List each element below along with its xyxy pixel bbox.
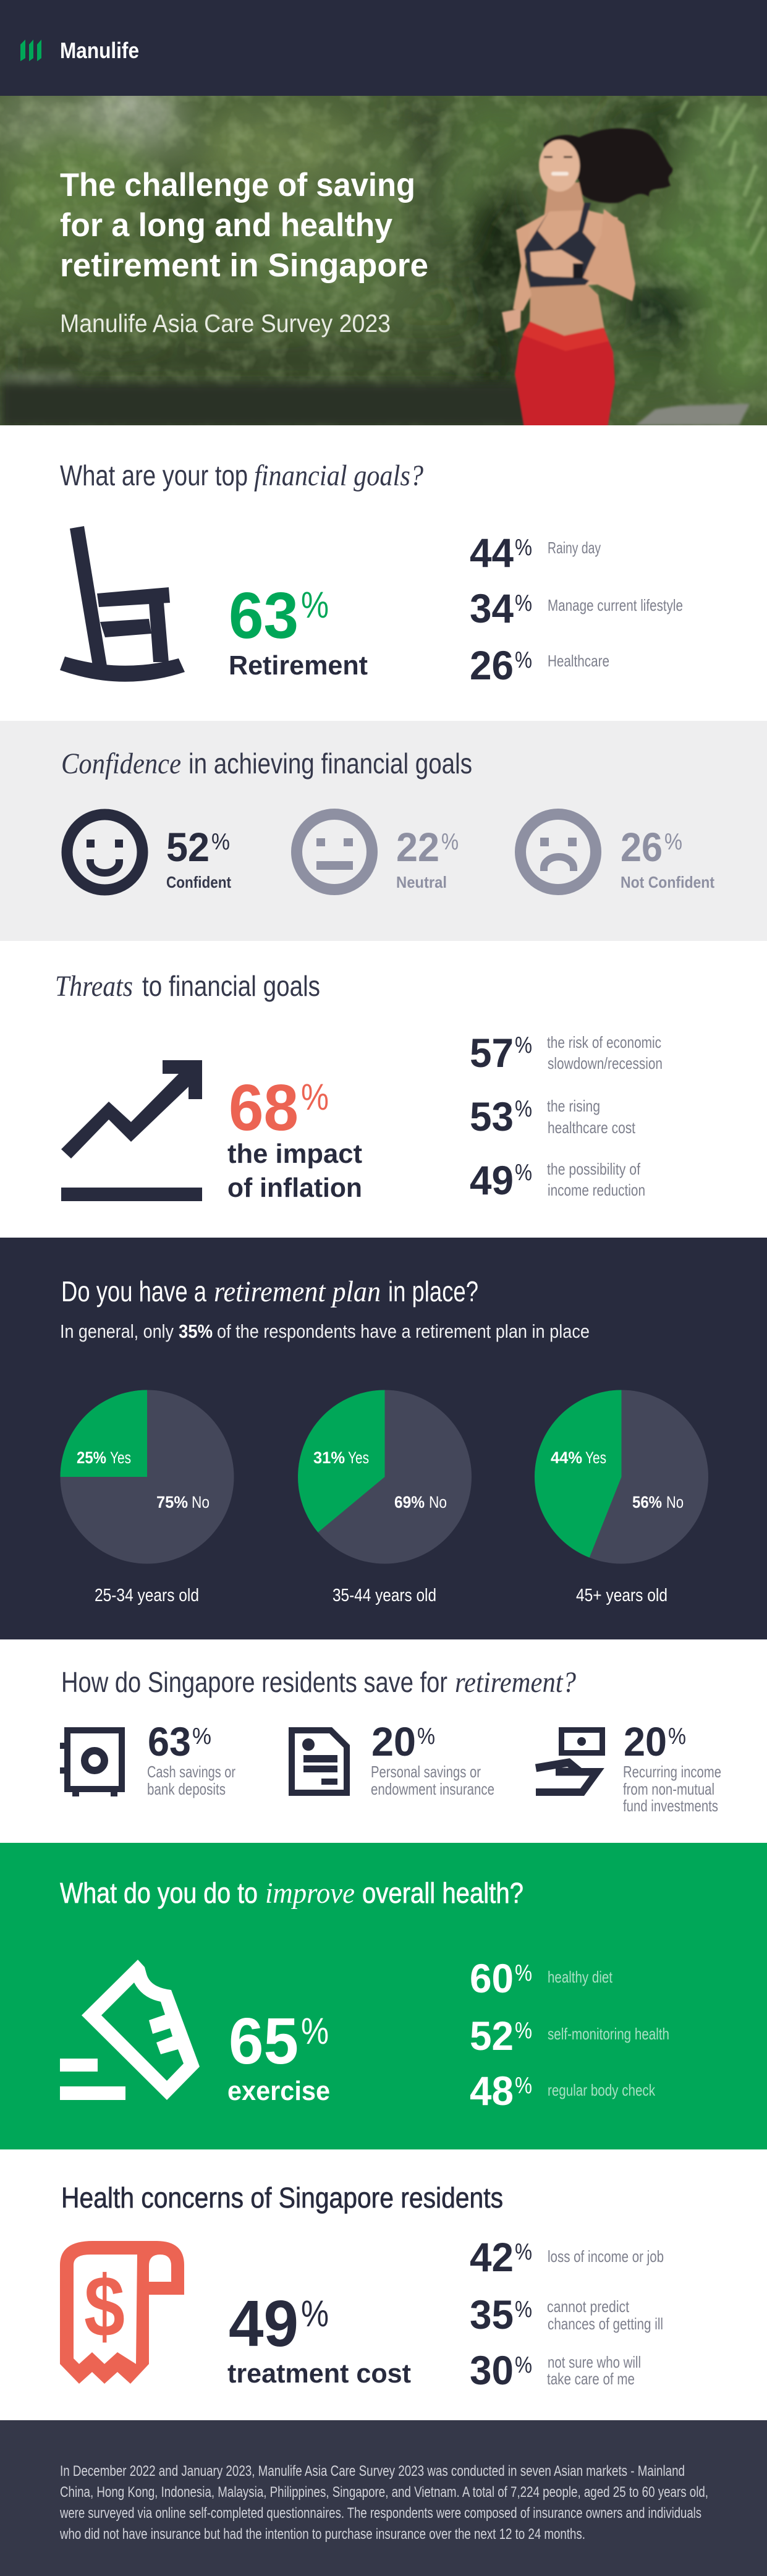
- stat: 65% exercise: exercise: [227, 2076, 330, 2106]
- stat: 60% healthy diet: %: [515, 1960, 532, 1986]
- stat: 30% who will take care: [470, 2347, 641, 2393]
- heading: retirement?: [455, 1666, 576, 1699]
- stat: 44% rainy day: %: [515, 535, 532, 561]
- stat: 30% who will take care: take care of me: [547, 2370, 635, 2388]
- stat: 52% self-monitoring health: %: [515, 2018, 532, 2044]
- stat: 49% income reduction: %: [515, 1160, 532, 1186]
- photo: forest background: [0, 87, 767, 428]
- pie chart: 25-34 years old: No: [192, 1493, 210, 1511]
- stat: 53% healthcare cost: %: [515, 1096, 532, 1122]
- title: [60, 167, 428, 284]
- stat: 44% rainy day: Rainy day: [548, 538, 601, 557]
- icon: rocking chair: [60, 526, 185, 682]
- subheading: In general, only: [60, 1320, 174, 1342]
- pie chart: 35-44 years old: 35-44 years old: [333, 1586, 436, 1605]
- icon: Manulife logo mark: [20, 40, 41, 61]
- heading: How do Singapore residents save for: [61, 1666, 447, 1698]
- stat: 48% regular body check: %: [515, 2073, 532, 2099]
- stat: 52% self-monitoring health: [470, 2013, 669, 2059]
- icon: neutral face: [297, 814, 372, 890]
- panel: how residents save: [60, 1666, 721, 1815]
- icon: medical bill: $: [84, 2258, 125, 2355]
- heading: Do you have a: [61, 1275, 206, 1307]
- stat: 52% self-monitoring health: 52: [470, 2013, 514, 2059]
- stat: 65% exercise: [227, 2005, 330, 2106]
- stat: 20% personal savings: endowment insurance: [371, 1780, 494, 1798]
- stat: 68% inflation: the impact: [227, 1139, 362, 1169]
- subtitle: Manulife Asia Care Survey 2023: [60, 309, 391, 338]
- heading: [61, 1275, 478, 1308]
- stat: 20% recurring income: [623, 1719, 721, 1815]
- stat: 63% retirement: [229, 579, 368, 681]
- stat: 35% cannot predict illness: 35: [470, 2292, 514, 2337]
- stat: 53% healthcare cost: healthcare cost: [548, 1118, 636, 1137]
- stat: 52% confident: 52: [166, 824, 210, 870]
- heading: in place?: [388, 1275, 478, 1307]
- stat: 57% economic slowdown: slowdown/recession: [548, 1054, 663, 1073]
- photo: leaves: [679, 102, 763, 253]
- stat: 63% cash savings: [147, 1719, 235, 1798]
- stat: 68% inflation: %: [301, 1076, 329, 1118]
- stat: 26% not confident: 26: [621, 824, 663, 870]
- panel: financial goals: [60, 459, 683, 688]
- icon: running shoe: [60, 1960, 200, 2100]
- panel: health concerns: [60, 2182, 664, 2393]
- stat: 30% who will take care: 30: [470, 2347, 514, 2393]
- pie chart: 45+ years old: Yes: [585, 1448, 606, 1467]
- pie chart: 25-34 years old: Yes: [110, 1448, 131, 1467]
- title: for a long and healthy: [60, 207, 393, 244]
- logo wordmark: Manulife: [60, 38, 139, 63]
- subheading: [60, 1320, 590, 1342]
- stat: 22% neutral: [396, 824, 459, 891]
- stat: 26% not confident: [621, 824, 714, 891]
- stat: 42% loss of income: loss of income or job: [548, 2247, 664, 2266]
- icon: hand holding cash: [536, 1730, 602, 1792]
- stat: 65% exercise: 65: [229, 2005, 299, 2078]
- pie chart: 35-44 years old: No: [429, 1493, 447, 1511]
- pie chart: 35-44 years old: 31%: [313, 1448, 345, 1467]
- stat: 34% manage current lifestyle: 34: [470, 585, 514, 631]
- subheading: of the respondents have a retirement plan in place: [217, 1320, 590, 1342]
- stat: 60% healthy diet: [470, 1955, 613, 2001]
- stat: 52% confident: Confident: [166, 873, 231, 891]
- stat: 63% cash savings: %: [192, 1724, 211, 1749]
- heading: What do you do to: [60, 1877, 258, 1909]
- pie chart: 45+ years old: 56%: [632, 1493, 662, 1511]
- pie chart: 45+ years old: 44%: [551, 1448, 582, 1467]
- heading: Threats: [55, 970, 133, 1003]
- panel: improve health: [0, 1843, 767, 2149]
- heading: financial goals?: [254, 459, 423, 492]
- stat: 30% who will take care: %: [515, 2352, 532, 2378]
- stat: 63% retirement: Retirement: [229, 650, 368, 681]
- stat: 20% recurring income: Recurring income: [623, 1762, 721, 1781]
- stat: 26% not confident: %: [664, 829, 682, 855]
- stat: 65% exercise: %: [301, 2010, 329, 2052]
- stat: 52% self-monitoring health: self-monitoring health: [548, 2025, 669, 2043]
- photo: jogger: [502, 129, 672, 428]
- stat: 34% manage current lifestyle: %: [515, 590, 532, 616]
- stat: 68% inflation: [227, 1071, 362, 1203]
- stat: 42% loss of income: %: [515, 2239, 532, 2265]
- heading: improve: [265, 1877, 355, 1910]
- stat: 57% economic slowdown: [470, 1030, 663, 1076]
- stat: 35% cannot predict illness: %: [515, 2297, 532, 2323]
- heading: [61, 747, 472, 780]
- stat: 49% treatment cost: 49: [229, 2287, 299, 2360]
- pie chart: 45+ years old: 45+ years old: [576, 1586, 667, 1605]
- stat: 49% income reduction: [470, 1157, 645, 1203]
- stat: 20% recurring income: from non-mutual: [623, 1780, 714, 1798]
- stat: 20% personal savings: [371, 1719, 494, 1798]
- stat: 48% regular body check: 48: [470, 2068, 514, 2114]
- stat: 26% healthcare: [470, 642, 609, 688]
- stat: 22% neutral: Neutral: [396, 873, 447, 891]
- stat: 20% personal savings: Personal savings or: [371, 1762, 481, 1781]
- panel: confidence: [0, 721, 767, 941]
- stat: 48% regular body check: regular body check: [548, 2081, 656, 2099]
- icon: rising arrow: [61, 1060, 202, 1201]
- icon: unhappy face: [520, 814, 596, 890]
- heading: [60, 1877, 523, 1910]
- pie chart: 25-34 years old: [61, 1390, 234, 1605]
- stat: 35% cannot predict illness: cannot predict: [547, 2297, 630, 2316]
- stat: 63% cash savings: Cash savings or: [147, 1762, 235, 1781]
- pie chart: 25-34 years old: 25-34 years old: [95, 1586, 199, 1605]
- panel: retirement plan: [0, 1238, 767, 1639]
- stat: 35% cannot predict illness: chances of getting ill: [548, 2315, 663, 2333]
- pie chart: 25-34 years old: 75%: [156, 1493, 188, 1511]
- stat: 49% income reduction: income reduction: [548, 1181, 645, 1199]
- icon: document: [292, 1730, 347, 1793]
- stat: 60% healthy diet: 60: [470, 1955, 514, 2001]
- panel: header bar: [0, 0, 767, 96]
- stat: 22% neutral: %: [441, 829, 459, 855]
- stat: 30% who will take care: not sure who will: [548, 2353, 641, 2371]
- heading: retirement plan: [214, 1275, 381, 1308]
- icon: safe: [60, 1730, 122, 1796]
- pie chart: 35-44 years old: [298, 1390, 472, 1605]
- panel: threats: [55, 970, 663, 1203]
- text block: survey methodology: who did not have insurance but had the intention to purchase insurance over the next 12 to 24 months.: [59, 2526, 585, 2543]
- stat: 63% retirement: %: [301, 584, 329, 626]
- stat: 49% income reduction: 49: [470, 1157, 514, 1203]
- stat: 20% recurring income: 20: [624, 1719, 667, 1764]
- heading: [55, 970, 320, 1003]
- panel: methodology footer: [0, 2420, 767, 2576]
- icon: happy face: [67, 815, 142, 890]
- stat: 60% healthy diet: healthy diet: [548, 1968, 613, 1986]
- text block: survey methodology: [59, 2463, 708, 2543]
- stat: 42% loss of income: 42: [470, 2234, 514, 2280]
- pie chart: 25-34 years old: 25%: [77, 1448, 106, 1467]
- icon: medical bill: [60, 2241, 184, 2384]
- stat: 44% rainy day: 44: [470, 530, 514, 576]
- stat: 53% healthcare cost: the rising: [547, 1097, 600, 1115]
- stat: 49% treatment cost: %: [301, 2293, 329, 2334]
- stat: 52% confident: %: [211, 829, 230, 855]
- stat: 57% economic slowdown: the risk of economic: [547, 1033, 661, 1052]
- stat: 63% cash savings: 63: [148, 1719, 191, 1764]
- stat: 57% economic slowdown: %: [515, 1032, 532, 1058]
- stat: 49% treatment cost: treatment cost: [227, 2358, 411, 2389]
- stat: 20% personal savings: 20: [371, 1719, 416, 1764]
- stat: 22% neutral: 22: [396, 824, 439, 870]
- heading: What are your top: [60, 459, 248, 491]
- stat: 34% manage current lifestyle: [470, 585, 683, 631]
- heading: to financial goals: [142, 970, 320, 1002]
- title: The challenge of saving: [60, 167, 415, 203]
- stat: 68% inflation: of inflation: [227, 1173, 362, 1203]
- panel: hero photo and title: [0, 87, 767, 428]
- heading: overall health?: [362, 1877, 523, 1909]
- heading: in achieving financial goals: [189, 747, 472, 780]
- stat: 49% income reduction: the possibility of: [547, 1160, 641, 1178]
- heading: [60, 459, 423, 492]
- stat: 26% healthcare: %: [515, 647, 532, 673]
- stat: 57% economic slowdown: 57: [470, 1030, 514, 1076]
- stat: 26% healthcare: 26: [470, 642, 514, 688]
- stat: 68% inflation: 68: [229, 1071, 299, 1144]
- stat: 26% healthcare: Healthcare: [548, 652, 609, 670]
- pie chart: 35-44 years old: 69%: [394, 1493, 425, 1511]
- stat: 53% healthcare cost: [470, 1094, 636, 1139]
- stat: 42% loss of income: [470, 2234, 664, 2280]
- stat: 63% retirement: 63: [229, 579, 299, 652]
- heading: Health concerns of Singapore residents: [61, 2182, 503, 2214]
- stat: 34% manage current lifestyle: Manage current lifestyle: [548, 596, 683, 614]
- stat: 20% personal savings: %: [417, 1724, 435, 1749]
- photo: walkway: [635, 404, 750, 425]
- title: retirement in Singapore: [60, 247, 428, 284]
- pie chart: 45+ years old: [535, 1390, 708, 1605]
- stat: 49% treatment cost: [227, 2287, 411, 2389]
- pie chart: 35-44 years old: Yes: [348, 1448, 369, 1467]
- heading: Confidence: [61, 747, 181, 780]
- subheading: 35%: [179, 1320, 213, 1342]
- stat: 44% rainy day: [470, 530, 601, 576]
- stat: 52% confident: [166, 824, 231, 891]
- pie chart: 45+ years old: No: [666, 1493, 684, 1511]
- stat: 35% cannot predict illness: [470, 2292, 663, 2337]
- stat: 63% cash savings: bank deposits: [147, 1780, 226, 1798]
- stat: 26% not confident: Not Confident: [621, 873, 714, 891]
- stat: 53% healthcare cost: 53: [470, 1094, 514, 1139]
- stat: 20% recurring income: fund investments: [623, 1796, 718, 1815]
- stat: 48% regular body check: [470, 2068, 656, 2114]
- stat: 20% recurring income: %: [668, 1724, 686, 1749]
